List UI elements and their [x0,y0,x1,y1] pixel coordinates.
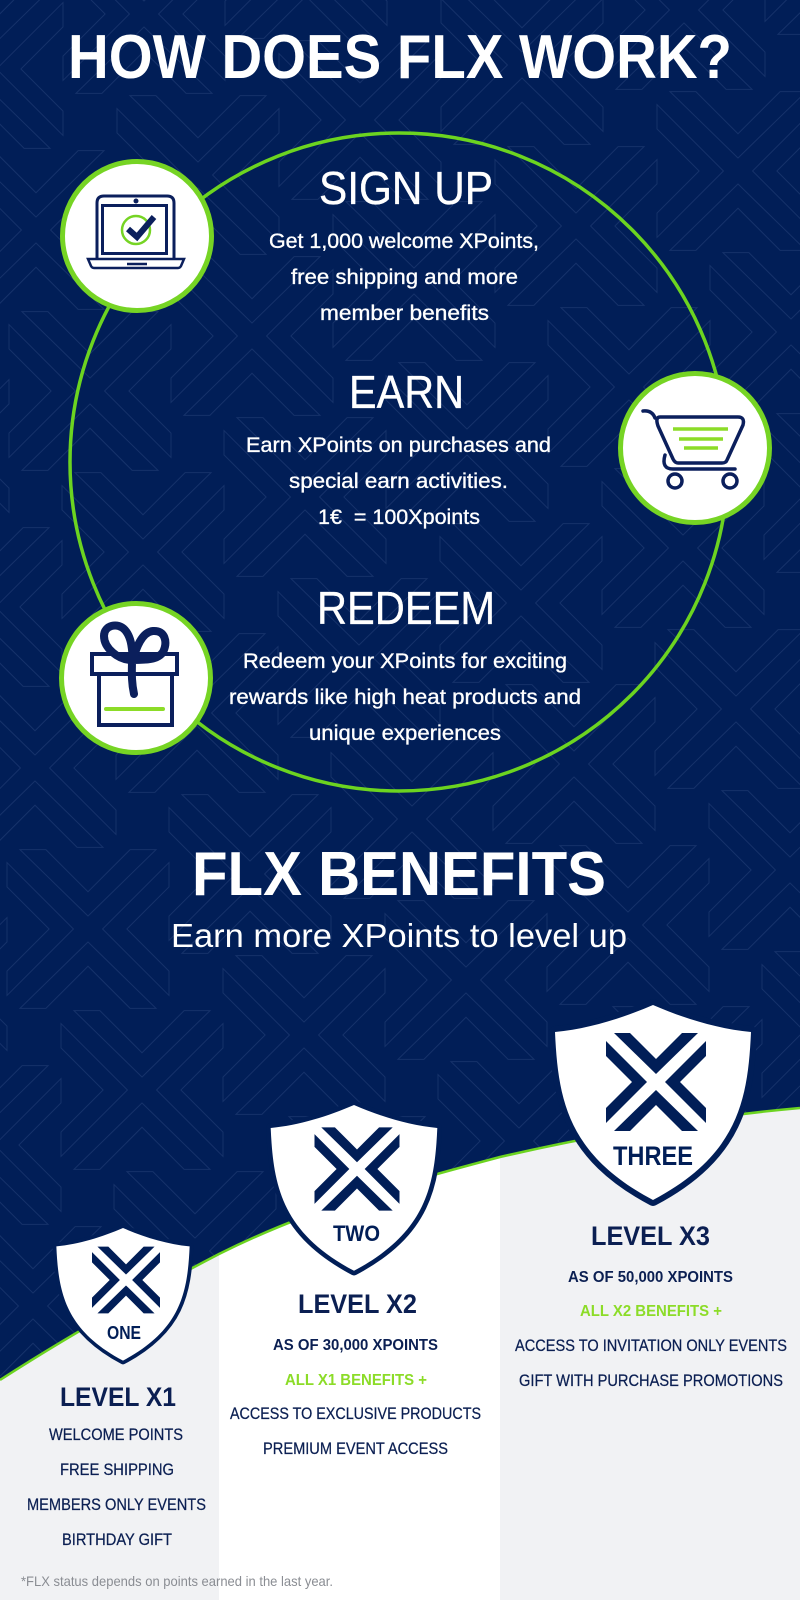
level X1 text: LEVEL X1 [60,1382,176,1412]
level X1 text [27,1382,206,1549]
step: earn: EARN [349,366,464,418]
level X3 text: AS OF 50,000 XPOINTS [568,1269,733,1286]
icon: shopping cart [620,374,770,522]
level X2 text: ACCESS TO EXCLUSIVE PRODUCTS [230,1404,481,1423]
step: sign up [269,162,539,325]
level X1 text: MEMBERS ONLY EVENTS [27,1495,206,1514]
level X2 text: PREMIUM EVENT ACCESS [263,1439,448,1458]
step: redeem: rewards like high heat products and [229,686,581,709]
step: earn: 1€ = 100Xpoints [318,506,480,529]
level X2 text: ALL X1 BENEFITS + [285,1372,427,1389]
badge: level two shield: TWO [333,1221,380,1246]
badge: level three shield [555,1005,751,1200]
heading: FLX benefits: FLX BENEFITS [192,840,606,909]
badge: level three shield: THREE [613,1141,693,1171]
level X1 text: WELCOME POINTS [49,1425,183,1444]
level X2 text: AS OF 30,000 XPOINTS [273,1337,438,1354]
panel: stepped columns under curve [0,1108,800,1600]
level X2 text: LEVEL X2 [298,1289,417,1319]
step: earn: special earn activities. [289,470,508,493]
step: redeem [229,582,581,745]
icon: laptop with check [62,162,212,310]
level X3 text: LEVEL X3 [591,1221,710,1251]
badge: level one shield: ONE [107,1323,141,1343]
level X1 text: FREE SHIPPING [60,1460,174,1479]
step: redeem: Redeem your XPoints for exciting [243,650,567,673]
step: sign up: SIGN UP [319,162,493,214]
icon: gift box [62,604,210,752]
step: earn [246,366,551,529]
level X3 text: ALL X2 BENEFITS + [580,1303,722,1320]
step: sign up: free shipping and more [291,266,518,289]
large green circle ring [70,133,728,791]
title: HOW DOES FLX WORK? [68,23,732,92]
step: earn: Earn XPoints on purchases and [246,434,551,457]
level X2 text [230,1289,481,1458]
badge: level one shield [56,1228,190,1361]
level X1 text: BIRTHDAY GIFT [62,1530,172,1549]
step: redeem: unique experiences [309,722,501,745]
level X3 text [515,1221,787,1390]
footnote: *FLX status depends on points earned in the last year. [21,1573,333,1589]
step: sign up: member benefits [320,302,489,325]
subheading: Earn more XPoints to level up [171,917,627,954]
step: redeem: REDEEM [317,582,495,634]
badge: level two shield [271,1105,437,1271]
step: sign up: Get 1,000 welcome XPoints, [269,230,539,253]
